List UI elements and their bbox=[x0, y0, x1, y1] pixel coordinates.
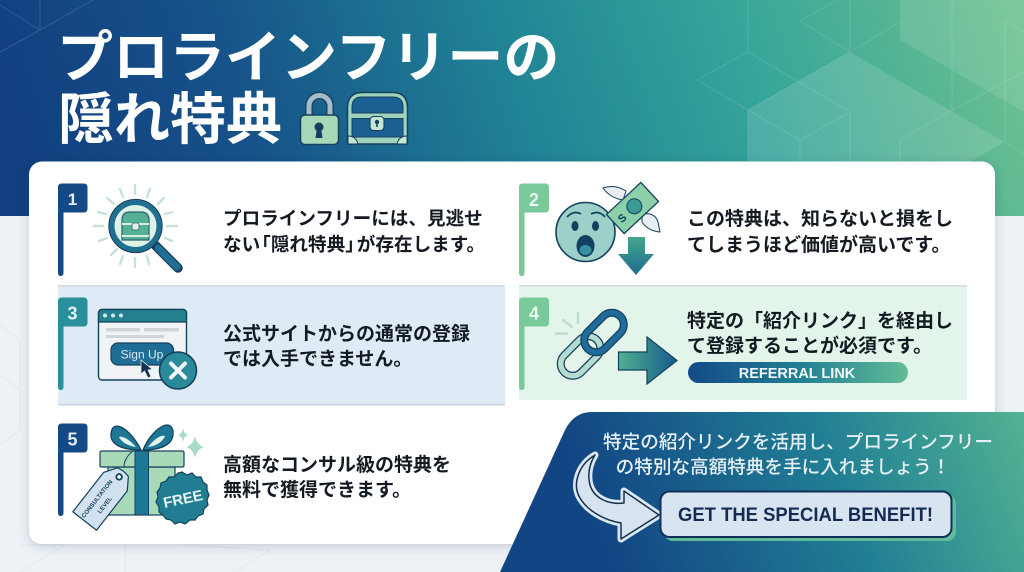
icon: treasure chest bbox=[348, 92, 408, 144]
icon: shocked face with flying money bbox=[556, 182, 660, 275]
flag 4 bbox=[519, 298, 549, 390]
header gradient band bbox=[0, 0, 1024, 216]
icon: shocked face with flying money: S bbox=[616, 212, 629, 226]
icon: browser sign up blocked bbox=[98, 310, 196, 389]
text: benefit 3: 公式サイトからの通常の登録 bbox=[223, 323, 470, 345]
flag 2: 2 bbox=[529, 190, 539, 210]
text: benefit 5 bbox=[223, 454, 451, 501]
panel: benefit 4 bbox=[519, 285, 967, 400]
text: benefit 1: ない「隠れ特典」が存在します。 bbox=[223, 234, 485, 255]
icon: padlock bbox=[300, 96, 338, 144]
text: benefit 3 bbox=[223, 323, 470, 370]
cta button: GET THE SPECIAL BENEFIT! bbox=[678, 505, 933, 526]
title bbox=[57, 26, 559, 151]
text: benefit 4 bbox=[687, 310, 953, 357]
cta button bbox=[660, 492, 956, 541]
title: プロラインフリーの bbox=[57, 26, 559, 89]
flag 5 bbox=[58, 424, 88, 516]
panel: benefit 5 bbox=[58, 424, 451, 530]
text: benefit 4: 特定の「紹介リンク」を経由し bbox=[687, 310, 953, 332]
flag 1: 1 bbox=[68, 190, 77, 209]
curved arrow bbox=[576, 455, 659, 539]
text: benefit 2: この特典は、知らないと損をし bbox=[687, 208, 953, 230]
icon: gift with tag and free badge bbox=[73, 425, 209, 530]
referral link pill bbox=[688, 362, 908, 383]
cta message: 特定の紹介リンクを活用し、プロラインフリー bbox=[603, 432, 993, 452]
panel: benefit 2 bbox=[519, 182, 953, 276]
text: benefit 5: 高額なコンサル級の特典を bbox=[223, 454, 451, 476]
icon: browser sign up blocked: Sign Up bbox=[121, 348, 164, 362]
title: 隠れ特典 bbox=[58, 88, 282, 151]
icon: magnifier over chest bbox=[94, 185, 178, 268]
icon: chain link and arrow bbox=[556, 308, 677, 384]
text: benefit 4: て登録することが必須です。 bbox=[687, 334, 932, 357]
referral link pill: REFERRAL LINK bbox=[739, 366, 856, 382]
text: benefit 5: 無料で獲得できます。 bbox=[223, 479, 411, 501]
panel: benefit 1 bbox=[58, 184, 485, 276]
icon: gift with tag and free badge: LEVEL bbox=[97, 496, 114, 515]
flag 3 bbox=[58, 298, 88, 390]
text: benefit 3: では入手できません。 bbox=[223, 348, 412, 370]
flag 3: 3 bbox=[67, 304, 78, 324]
text: benefit 1 bbox=[223, 208, 485, 255]
flag 2 bbox=[519, 184, 549, 276]
cta message: の特別な高額特典を手に入れましょう！ bbox=[616, 456, 950, 478]
cta message bbox=[603, 432, 993, 478]
text: benefit 2: てしまうほど価値が高いです。 bbox=[687, 233, 951, 256]
panel: benefit 3 bbox=[58, 285, 505, 406]
flag 4: 4 bbox=[529, 304, 539, 324]
main white card bbox=[29, 162, 995, 544]
flag 1 bbox=[58, 184, 88, 276]
flag 5: 5 bbox=[67, 430, 78, 450]
text: benefit 2 bbox=[687, 208, 953, 256]
icon: gift with tag and free badge: FREE bbox=[162, 487, 204, 512]
icon: gift with tag and free badge: CONSULTATION bbox=[81, 479, 114, 520]
text: benefit 1: プロラインフリーには、見逃せ bbox=[223, 208, 483, 229]
panel: call to action bbox=[500, 412, 1024, 572]
